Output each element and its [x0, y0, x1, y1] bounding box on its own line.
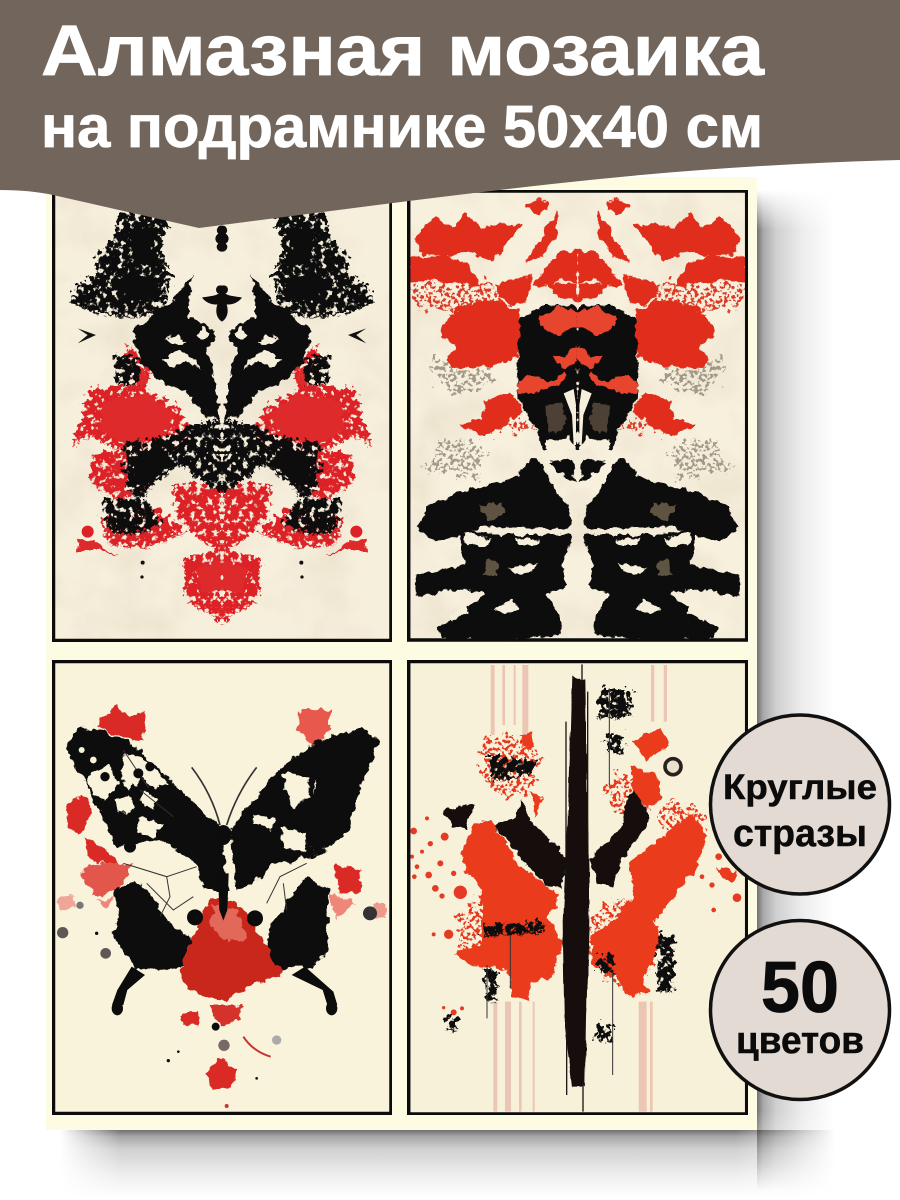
faint drip lines: [493, 665, 665, 1112]
badge: 50 colours: [710, 920, 890, 1100]
subtitle: на подрамнике 50х40 см: [41, 94, 763, 160]
badge: 50 colours: цветов: [736, 1020, 864, 1062]
panel: bottom right vertical stroke: [407, 660, 748, 1115]
black wing marks: [444, 790, 650, 887]
badge: round rhinestones: Круглые: [723, 768, 877, 807]
red centre blot: [180, 897, 282, 1000]
badge: round rhinestones: [710, 715, 890, 894]
panel: top left ink blot: [52, 190, 392, 642]
panel: bottom left butterfly: [52, 660, 392, 1115]
canvas shadow: [60, 190, 835, 1200]
badge: 50 colours: 50: [761, 948, 839, 1028]
eye mark: [665, 759, 681, 775]
red droplets: [410, 816, 741, 1015]
title: [41, 12, 765, 160]
canvas board: [46, 177, 757, 1130]
title: Алмазная мозаика: [41, 12, 765, 91]
wing veins: [123, 750, 307, 917]
ink splatter dots: [57, 902, 377, 1108]
black stroke: [563, 676, 589, 1087]
butterfly tails: [112, 967, 337, 1015]
red blot: [459, 735, 702, 985]
panel: top right figure in suit: [407, 190, 748, 642]
butterfly body and antennae: [192, 767, 257, 921]
badge: round rhinestones: стразы: [733, 813, 867, 855]
small foliage marks: [445, 690, 674, 1042]
butterfly wings: [67, 728, 380, 973]
flowers and red accents: [57, 705, 387, 1090]
header banner: [0, 0, 900, 228]
